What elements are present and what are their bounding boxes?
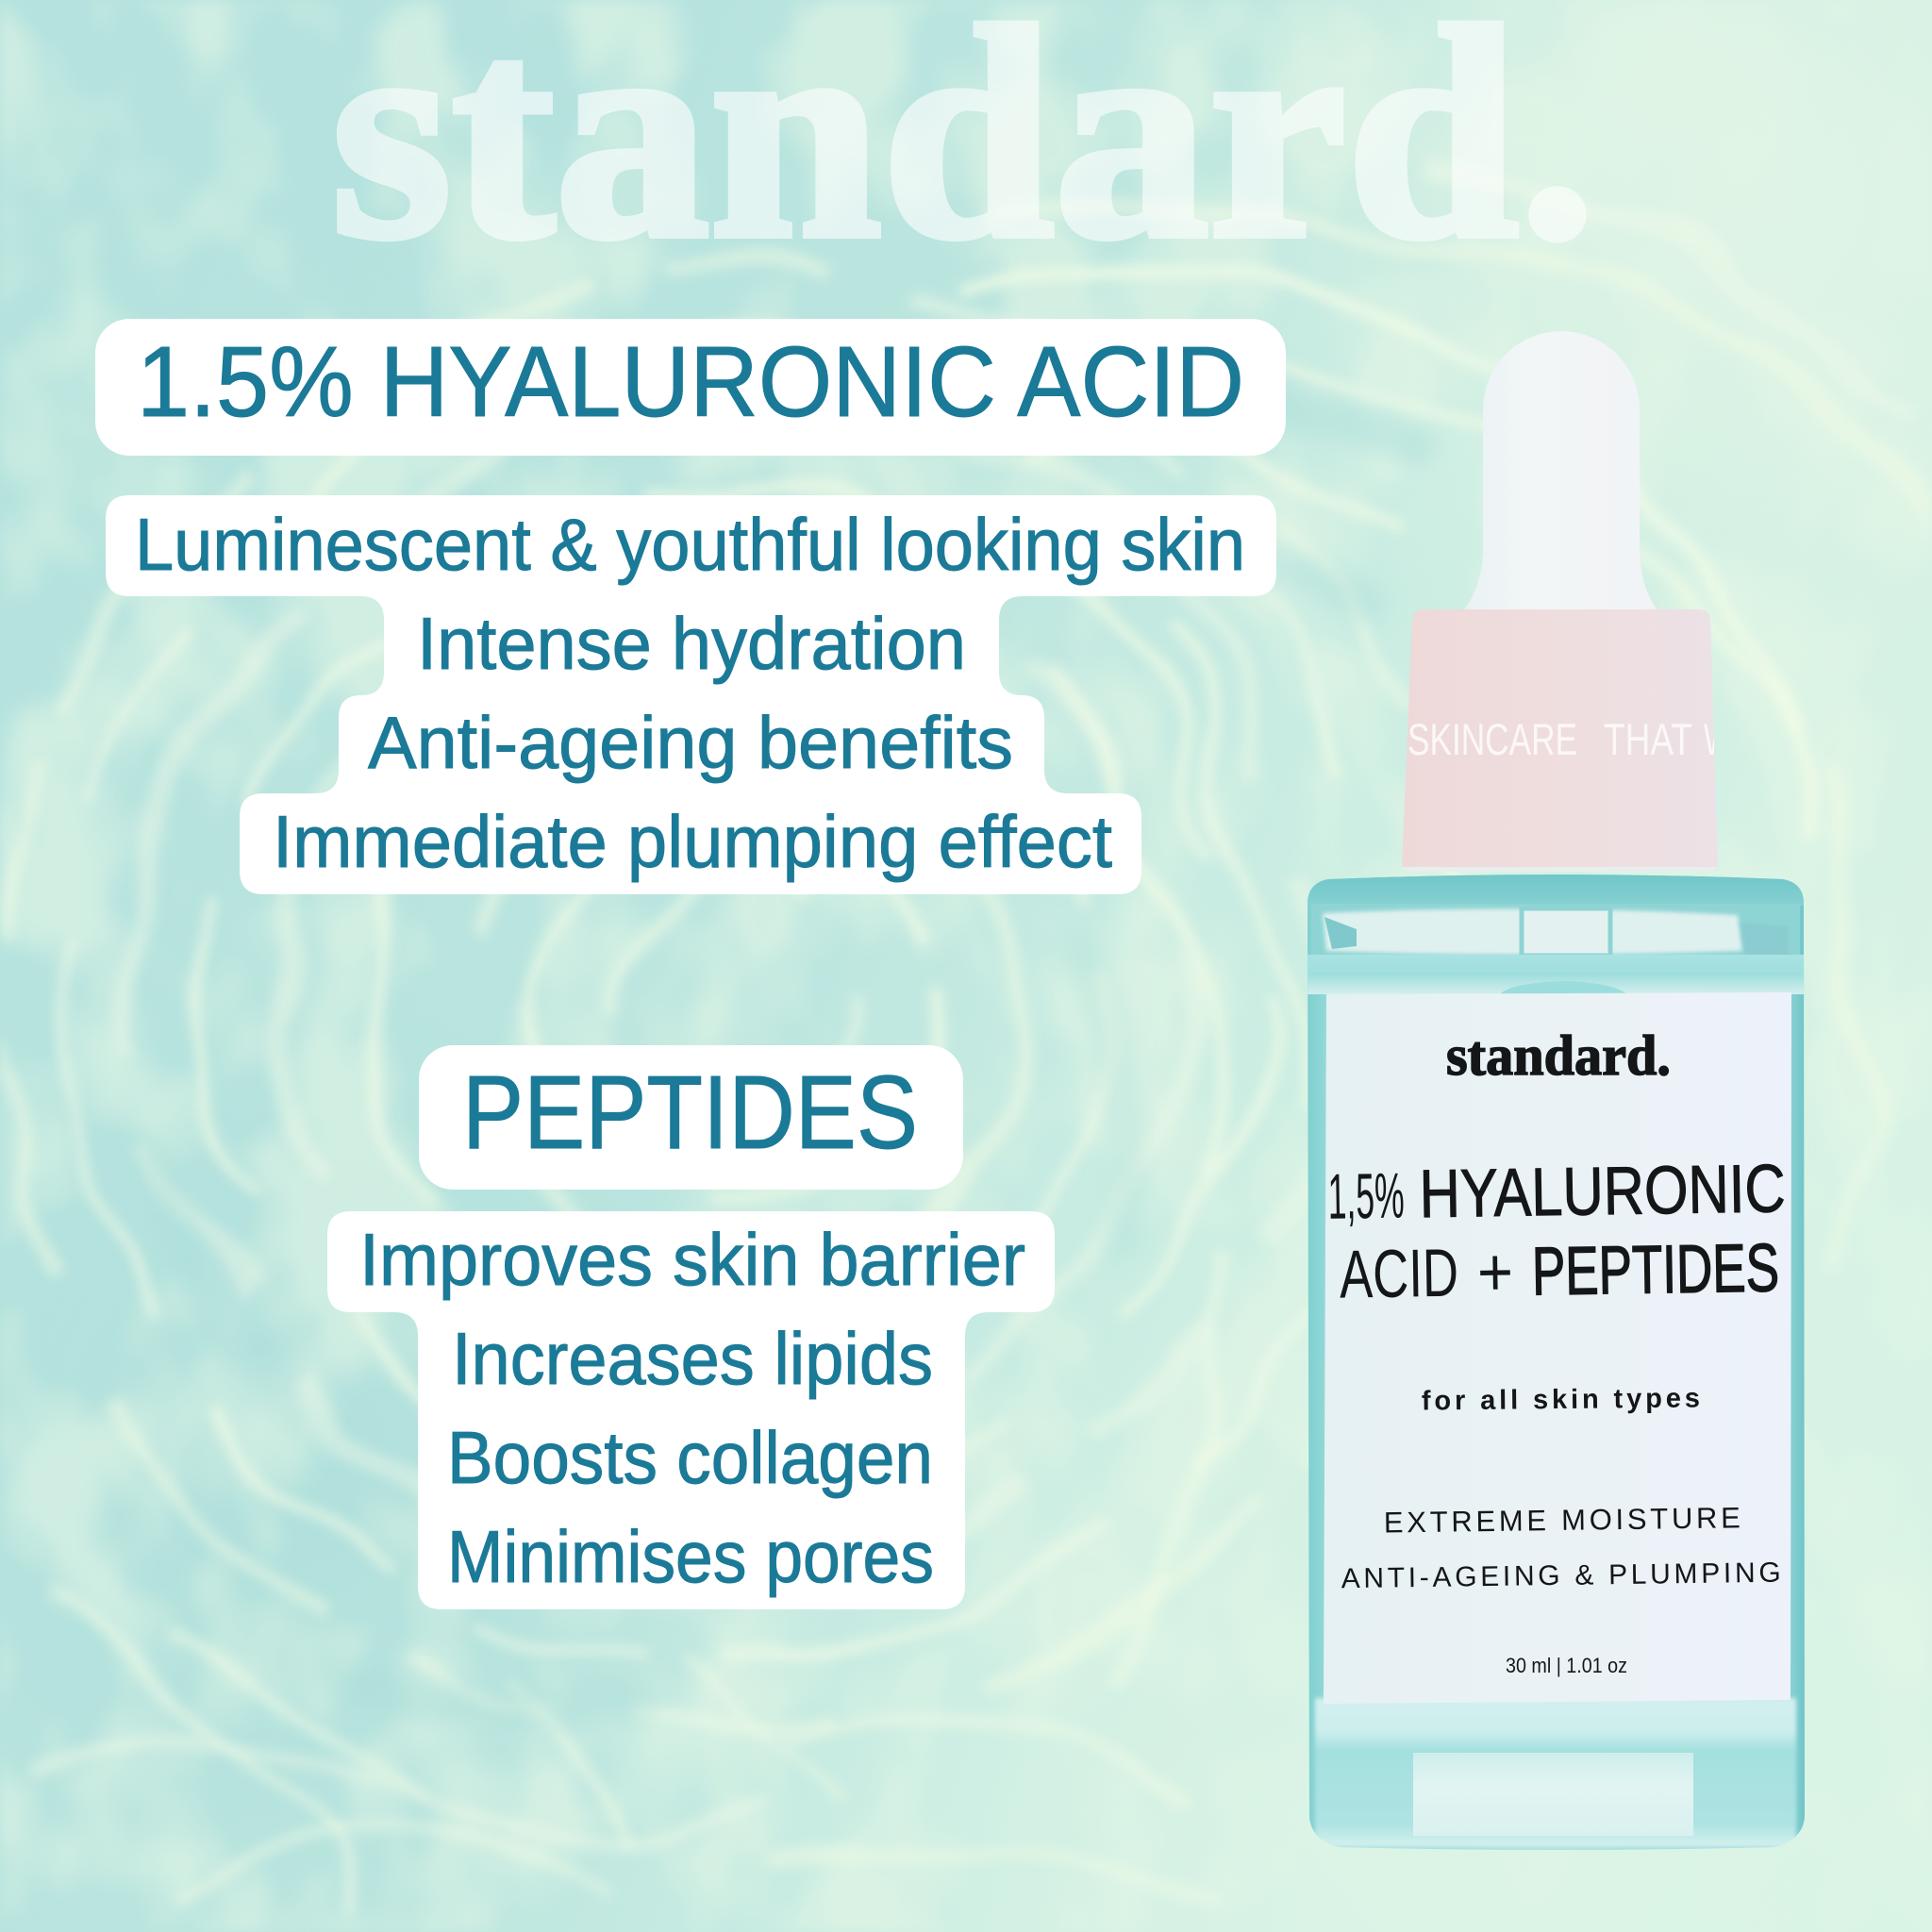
product label (1324, 992, 1791, 1704)
benefits list: peptides: Boosts collagen (447, 1416, 933, 1499)
label claims: ANTI-AGEING & PLUMPING (1341, 1557, 1781, 1594)
benefits list: hyaluronic acid (106, 495, 1276, 894)
label product name (1327, 1151, 1788, 1313)
bottle base (1315, 1698, 1796, 1847)
label product name: + (1476, 1235, 1514, 1310)
dropper collar: W (1704, 714, 1732, 764)
label claims: EXTREME MOISTURE (1384, 1501, 1740, 1540)
benefits list: hyaluronic acid: Immediate plumping effect (273, 800, 1112, 883)
benefits list: peptides: Increases lipids (452, 1317, 933, 1400)
label product name: ACID (1339, 1236, 1459, 1313)
panel: peptides (327, 1045, 1055, 1609)
label product name: PEPTIDES (1531, 1230, 1780, 1309)
heading: peptides: PEPTIDES (462, 1055, 918, 1171)
dropper collar (1402, 609, 1732, 872)
dropper bulb (1464, 331, 1657, 609)
benefits list: peptides (327, 1211, 1055, 1609)
benefits list: peptides: Minimises pores (447, 1515, 934, 1598)
benefits list: peptides: Improves skin barrier (359, 1218, 1025, 1301)
label volume: 30 ml | 1.01 oz (1506, 1654, 1627, 1677)
dropper collar: THAT (1604, 714, 1692, 764)
dropper collar: SKINCARE (1407, 714, 1577, 764)
benefits list: hyaluronic acid: Luminescent & youthful looking skin (135, 503, 1245, 586)
glass body (1307, 874, 1805, 1850)
label skin types: for all skin types (1422, 1383, 1700, 1416)
panel: hyaluronic acid (95, 319, 1286, 894)
benefits list: hyaluronic acid: Anti-ageing benefits (368, 701, 1013, 784)
label product name: HYALURONIC (1419, 1151, 1786, 1232)
label product name: 1,5% (1327, 1160, 1405, 1233)
product: serum bottle (1307, 331, 1805, 1850)
label brand: standard. (1446, 1024, 1671, 1087)
shoulder highlights (1307, 874, 1805, 994)
benefits list: hyaluronic acid: Intense hydration (417, 602, 966, 685)
heading: 1.5% hyaluronic acid: 1.5% HYALURONIC ACID (137, 326, 1244, 438)
label claims (1341, 1501, 1781, 1594)
